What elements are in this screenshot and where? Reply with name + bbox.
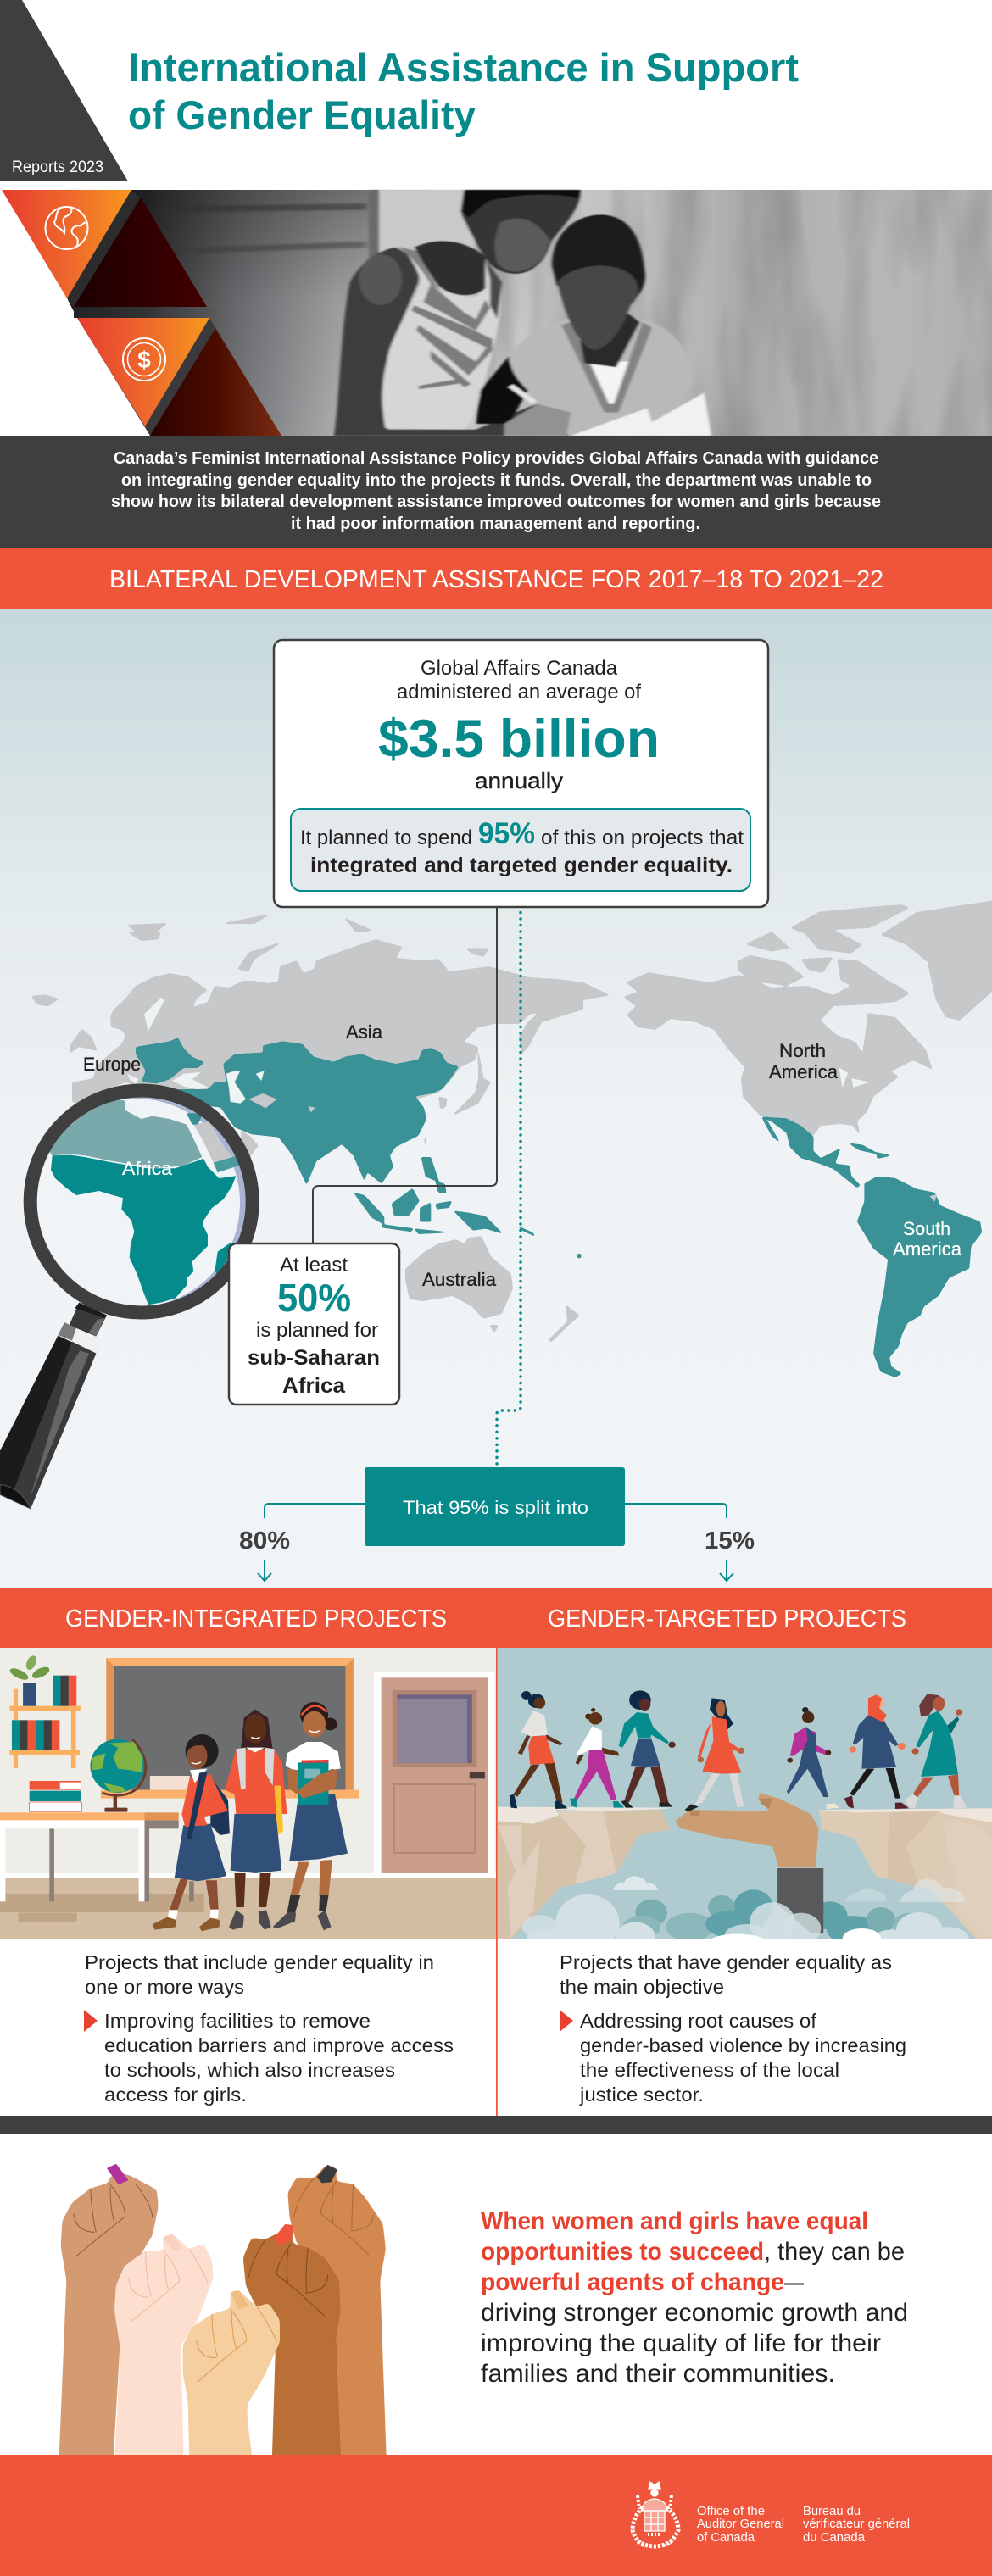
text: closing statement: , they can be	[764, 2238, 905, 2266]
section heading: bilateral development assistance	[0, 548, 992, 609]
text: gender-integrated description	[84, 1951, 454, 2106]
person 4	[685, 1698, 744, 1811]
section heading: bilateral development assistance: BILATERAL DEVELOPMENT ASSISTANCE FOR 2017–18 TO 2021–22	[109, 566, 883, 593]
intro band: it had poor information management and reporting.	[291, 515, 700, 533]
person 3	[619, 1690, 676, 1808]
text: closing statement: families and their communities.	[481, 2360, 835, 2388]
text: closing statement: opportunities to succeed	[481, 2238, 764, 2266]
left cliff	[498, 1807, 672, 1939]
icon: dollar coin: $	[137, 347, 151, 373]
callout: $3.5 billion: Global Affairs Canada	[421, 657, 618, 680]
schoolgirl: right	[273, 1702, 348, 1930]
text: gender-integrated description: one or more ways	[85, 1976, 244, 1998]
fist: back left	[59, 2165, 159, 2464]
label: South America	[893, 1218, 962, 1260]
callout: 50% sub-Saharan Africa	[229, 1243, 399, 1405]
text: office name English: Auditor General	[697, 2517, 784, 2531]
footer band	[0, 2455, 992, 2576]
dark divider band	[0, 2116, 992, 2134]
box: that 95% is split into	[365, 1467, 625, 1546]
box: that 95% is split into: That 95% is split into	[403, 1497, 588, 1518]
label: South America: South	[903, 1218, 950, 1239]
inner box: 95% planned: of this on projects that	[541, 826, 744, 849]
split connectors	[265, 1504, 727, 1518]
text: office name English: of Canada	[697, 2530, 755, 2545]
figure: 15% with arrow	[705, 1527, 755, 1581]
woman head	[461, 190, 581, 274]
banner triangles	[0, 190, 281, 436]
icon: globe	[46, 207, 88, 249]
panel: world map background	[0, 609, 992, 1588]
figure: 15% with arrow: 15%	[705, 1527, 755, 1555]
map labels: America	[769, 1061, 839, 1082]
intro band	[0, 436, 992, 548]
solid connector line to sub-Saharan callout	[313, 907, 497, 1243]
illustration: women walking across a gap	[498, 1648, 992, 1951]
girl neck and head	[578, 314, 640, 367]
person 5	[787, 1707, 839, 1809]
person 6	[844, 1694, 909, 1809]
magnifier lens with Africa	[31, 1097, 247, 1307]
text: gender-integrated description: to schools, which also increases	[104, 2059, 395, 2081]
intro band: show how its bilateral development assistance improved outcomes for women and girls because	[111, 492, 881, 511]
intro band: on integrating gender equality into the projects it funds. Overall, the department was unable to	[121, 471, 872, 490]
header: dark triangle with report label	[0, 0, 128, 181]
map: great lakes	[839, 1067, 870, 1088]
foreground clouds	[522, 1894, 968, 1951]
hand, pen and paper	[504, 404, 571, 436]
girl dress	[509, 320, 711, 436]
person 7	[905, 1694, 967, 1808]
rugs	[0, 1894, 204, 1922]
text: office name English: Office of the	[697, 2504, 765, 2518]
text: office name French: du Canada	[803, 2530, 866, 2545]
callout: 50% sub-Saharan Africa: 50%	[277, 1276, 351, 1320]
illustration: raised fists	[59, 2165, 387, 2464]
text: office name French: vérificateur général	[803, 2517, 910, 2531]
person 1	[510, 1691, 568, 1809]
world map	[31, 899, 992, 1377]
section headings: project types: GENDER-INTEGRATED PROJECTS	[65, 1605, 447, 1633]
inner box: 95% planned: integrated and targeted gender equality.	[310, 854, 733, 877]
callout: $3.5 billion: administered an average of	[397, 681, 641, 704]
section headings: project types	[0, 1588, 992, 1648]
header: dark triangle with report label: Reports 2023	[12, 159, 103, 176]
text: gender-targeted description: Addressing root causes of	[580, 2010, 817, 2032]
text: closing statement: driving stronger economic growth and	[481, 2299, 908, 2327]
woman arm and body	[334, 248, 571, 436]
label: South America: America	[893, 1238, 962, 1260]
text: gender-integrated description: Improving facilities to remove	[104, 2010, 371, 2032]
title: International Assistance in Support	[128, 45, 799, 90]
callout: $3.5 billion: annually	[475, 768, 563, 793]
photo banner: two girls writing	[68, 190, 992, 436]
text: gender-targeted description: Projects that have gender equality as	[560, 1951, 892, 1973]
right cliff	[819, 1808, 992, 1939]
map: teal priority regions	[136, 1038, 982, 1377]
map: sea and lake cut-outs	[127, 998, 209, 1089]
magnifier ring	[31, 1090, 253, 1312]
stacked books	[30, 1781, 82, 1812]
bookshelf	[8, 1655, 81, 1768]
magnifier handle	[0, 1303, 107, 1509]
panel: project descriptions	[0, 1648, 992, 2116]
icon: dollar coin	[123, 338, 165, 381]
woman dress	[383, 247, 502, 430]
illustration: classroom	[0, 1648, 496, 1939]
text: gender-targeted description	[560, 1951, 906, 2106]
map labels: North	[779, 1040, 826, 1061]
fist: back right	[287, 2166, 387, 2464]
fist: pale	[114, 2234, 214, 2464]
map labels	[83, 1021, 839, 1290]
map: grey land	[31, 899, 992, 1343]
schoolgirl: left	[153, 1734, 230, 1931]
figure: 80% with arrow: 80%	[239, 1527, 290, 1555]
magnifying glass	[0, 1090, 253, 1509]
title: of Gender Equality	[128, 92, 476, 137]
map labels: Europe	[83, 1054, 141, 1075]
text: closing statement: —	[784, 2268, 804, 2296]
figure: 80% with arrow	[239, 1527, 290, 1581]
chair	[476, 356, 528, 424]
text: gender-integrated description: access for girls.	[104, 2084, 247, 2106]
callout: $3.5 billion	[274, 640, 768, 907]
text: gender-targeted description: justice sector.	[579, 2084, 704, 2106]
inner box: 95% planned	[291, 809, 750, 891]
intro band: Canada’s Feminist International Assistance Policy provides Global Affairs Canada with guidance	[114, 449, 878, 468]
text: closing statement: improving the quality of life for their	[481, 2329, 881, 2357]
text: closing statement	[481, 2207, 908, 2388]
text: gender-targeted description: gender-based violence by increasing	[580, 2034, 906, 2056]
inner box: 95% planned: 95%	[478, 817, 535, 850]
triangle: money panel	[77, 318, 209, 426]
title	[128, 45, 799, 137]
text: office name French: Bureau du	[803, 2504, 861, 2518]
text: closing statement: When women and girls have equal	[481, 2207, 868, 2235]
text: office name French	[803, 2504, 910, 2545]
map labels: Asia	[346, 1021, 383, 1043]
text: gender-integrated description: Projects that include gender equality in	[85, 1951, 434, 1973]
text: office name English	[697, 2504, 784, 2545]
small clouds	[613, 1876, 966, 1902]
globe	[90, 1739, 146, 1812]
schoolgirl: middle	[225, 1710, 287, 1930]
callout: 50% sub-Saharan Africa: Africa	[282, 1374, 346, 1398]
text: gender-integrated description: education barriers and improve access	[104, 2034, 454, 2056]
big number: $3.5 billion	[378, 709, 660, 769]
fist: light tan	[183, 2290, 280, 2464]
desk	[0, 1812, 194, 1901]
background clouds	[622, 1889, 912, 1939]
hand holding the path	[675, 1793, 823, 1933]
text: closing statement: powerful agents of change	[481, 2268, 784, 2296]
dotted connector line to split box	[497, 893, 521, 1465]
blackboard	[101, 1658, 359, 1799]
inner box: 95% planned: It planned to spend	[300, 826, 472, 849]
icon: coat of arms	[633, 2482, 678, 2546]
text: gender-targeted description: the main objective	[560, 1976, 724, 1998]
callout: 50% sub-Saharan Africa: At least	[280, 1254, 348, 1277]
text: gender-targeted description: the effectiveness of the local	[580, 2059, 839, 2081]
label: Africa: Africa	[122, 1158, 173, 1179]
section headings: project types: GENDER-TARGETED PROJECTS	[548, 1605, 906, 1633]
triangle: globe panel	[2, 190, 131, 298]
map labels: Australia	[422, 1269, 497, 1290]
callout: 50% sub-Saharan Africa: is planned for	[256, 1319, 378, 1342]
callout: 50% sub-Saharan Africa: sub-Saharan	[248, 1346, 380, 1370]
person 2	[570, 1708, 624, 1808]
map: Caspian and grey enclaves	[226, 1071, 426, 1146]
fist: dark	[243, 2225, 342, 2464]
door	[374, 1672, 494, 1878]
